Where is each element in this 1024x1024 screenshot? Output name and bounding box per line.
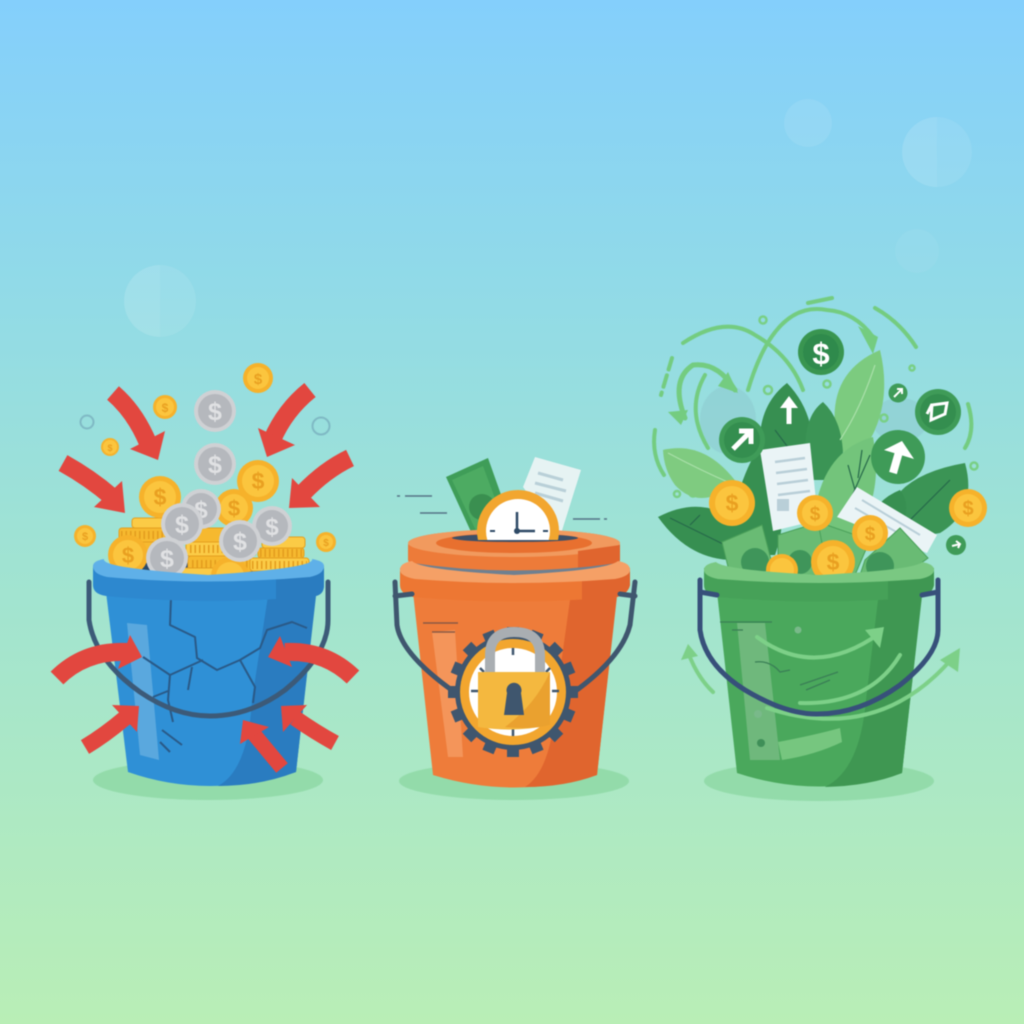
gold coin: $ <box>122 543 134 568</box>
light leaf left <box>663 448 737 498</box>
dark leaf bottom left <box>658 507 742 560</box>
motion lines <box>397 496 607 519</box>
ground shadow <box>399 762 629 800</box>
pale swoosh on bucket <box>778 728 842 760</box>
gear lock emblem <box>448 627 578 757</box>
body highlight strip <box>432 630 463 757</box>
green arrow badge right <box>915 389 961 435</box>
rim light lip <box>400 561 630 583</box>
silver coin <box>252 506 292 546</box>
gold coin flying: $ <box>323 538 329 549</box>
gold coin <box>766 554 798 586</box>
silver coin: $ <box>265 514 279 541</box>
silver coin: $ <box>194 497 208 524</box>
gold coin <box>108 535 148 575</box>
gold coin: $ <box>827 549 840 575</box>
blue bucket body <box>106 592 316 786</box>
green dollar badge <box>798 329 844 375</box>
gold coin flying <box>74 525 96 547</box>
pale leaf veins <box>668 365 875 483</box>
red arrow <box>57 635 142 678</box>
silver coin <box>146 537 188 579</box>
padlock body <box>478 672 550 730</box>
small dots <box>674 316 978 497</box>
cracks <box>143 598 307 752</box>
document slanted <box>837 487 937 553</box>
rim band shade <box>888 570 934 601</box>
gold coin <box>852 515 888 551</box>
red arrow <box>289 458 350 508</box>
grey gap between lid and rim <box>406 563 622 578</box>
lid shade <box>578 545 620 570</box>
gold coin <box>237 460 279 502</box>
coin stack ridges <box>121 535 307 565</box>
keyhole <box>504 683 524 715</box>
gold coin flying <box>101 438 119 456</box>
gold coin <box>139 476 181 518</box>
dark leaf behind left <box>728 445 782 555</box>
body right shade <box>218 596 316 786</box>
gold coin: $ <box>810 504 821 525</box>
rim band <box>704 568 934 602</box>
gear <box>448 627 578 757</box>
banknotes <box>722 522 928 575</box>
small marks <box>423 623 458 632</box>
gold coin <box>949 489 987 527</box>
note seals <box>741 548 894 580</box>
gold coin flying: $ <box>107 443 113 453</box>
gold coin: $ <box>228 496 240 521</box>
small arrow badge <box>888 384 908 402</box>
dark leaf right lower <box>868 490 906 535</box>
red arrow <box>113 393 165 460</box>
silver coin <box>219 520 261 562</box>
lid slot <box>452 534 578 542</box>
bucket 3: growing green bucket <box>654 298 987 801</box>
red arrow <box>281 705 335 743</box>
rim light lip <box>704 562 934 583</box>
clock ticks <box>471 648 559 736</box>
silver coin flying <box>194 443 236 485</box>
green bucket body <box>717 592 922 786</box>
dark leaf second <box>805 402 843 480</box>
rim band shade <box>276 568 324 600</box>
green dollar badge: $ <box>812 336 830 371</box>
gold coin flying <box>316 532 336 552</box>
gold coin flying <box>153 395 177 419</box>
orange bucket body <box>413 592 617 788</box>
pale background blobs <box>700 386 928 454</box>
small arrow badge <box>946 535 966 555</box>
silver coin flying <box>194 390 236 432</box>
growth swirl lines <box>654 298 971 475</box>
rim band <box>400 568 630 602</box>
document <box>760 443 818 531</box>
clock face <box>469 648 557 736</box>
bucket growth arrows <box>688 633 955 719</box>
red arrow <box>258 390 310 457</box>
gold coin <box>797 495 833 531</box>
bucket 2: locked orange bucket <box>395 457 635 800</box>
gold coin flying: $ <box>254 371 263 388</box>
gold coin flying <box>243 363 273 393</box>
ground shadow <box>704 761 934 801</box>
bucket dots <box>754 626 802 747</box>
padlock shackle <box>490 632 540 672</box>
banknote <box>446 458 510 545</box>
light leaf tall <box>835 350 884 456</box>
gold coin <box>215 489 253 527</box>
clock ring <box>460 639 566 745</box>
bucket marks <box>720 622 838 690</box>
rim light lip <box>93 559 324 582</box>
lid top recess <box>436 533 592 553</box>
leaf veins <box>670 430 950 545</box>
gold coin: $ <box>154 484 167 510</box>
red arrow <box>268 636 353 677</box>
small rings <box>80 416 330 434</box>
green arrow badge <box>719 417 765 463</box>
silver coin <box>181 489 221 529</box>
body right shade <box>825 596 922 787</box>
gold coin: $ <box>865 524 876 545</box>
background bubbles <box>124 99 972 337</box>
gold coin: $ <box>962 498 974 520</box>
bucket rim <box>93 566 324 601</box>
paper document <box>523 457 581 537</box>
padlock shade <box>505 672 550 728</box>
silver coin: $ <box>233 528 247 556</box>
silver coin flying: $ <box>208 451 222 479</box>
silver coin flying: $ <box>208 398 222 426</box>
gold coin flying: $ <box>162 401 169 415</box>
silver coin <box>161 503 203 545</box>
gold coin <box>811 540 855 584</box>
dark leaf upright <box>760 383 813 465</box>
arrowheads <box>681 627 960 672</box>
rim band shade <box>582 570 630 601</box>
handle <box>89 582 328 716</box>
red arrow <box>240 720 282 768</box>
red arrow <box>63 463 125 513</box>
handle <box>395 582 635 708</box>
clock half dial <box>476 489 560 541</box>
gold coin: $ <box>726 490 739 516</box>
dark leaf right <box>885 463 968 535</box>
body highlight strip <box>737 623 780 760</box>
silver coin: $ <box>175 511 189 539</box>
gold coin: $ <box>252 468 265 494</box>
body right shade <box>525 596 617 787</box>
body highlight strip <box>127 623 159 760</box>
bucket 1: leaking blue bucket <box>57 363 353 800</box>
lid <box>408 530 620 572</box>
gold coin flying: $ <box>82 531 88 543</box>
lid top rim <box>408 529 620 557</box>
ground shadow <box>93 760 323 800</box>
swirl arrowheads <box>668 326 878 425</box>
gold coin stacks <box>119 518 309 578</box>
mid green leaf center <box>815 437 876 548</box>
silver coin: $ <box>160 545 174 573</box>
gold coin <box>709 480 755 526</box>
big green arrow badge <box>871 430 925 484</box>
bucket inner opening <box>100 561 316 579</box>
red arrow <box>85 705 139 747</box>
up arrow on leaf <box>780 396 798 424</box>
handle <box>700 580 938 714</box>
gold coin <box>211 557 249 595</box>
